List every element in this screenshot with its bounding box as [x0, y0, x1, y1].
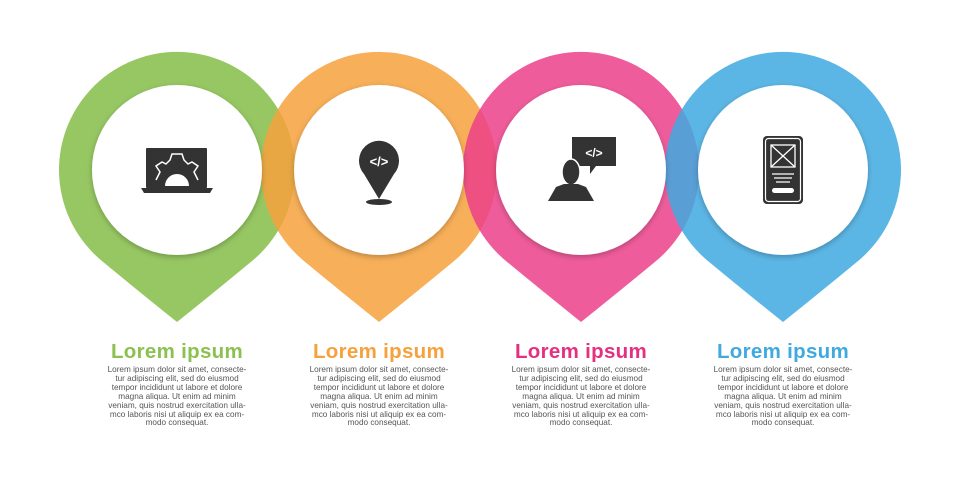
text: blue — [714, 365, 852, 427]
icon: code location — [359, 141, 399, 205]
text: orange: modo consequat. — [348, 418, 410, 427]
text: pink — [512, 365, 650, 427]
text: green: magna aliqua. Ut enim ad minim — [118, 392, 236, 401]
icon: mobile wireframe — [763, 136, 803, 204]
text: pink: tempor incididunt ut labore et dolore — [516, 383, 646, 392]
text: orange — [310, 365, 448, 427]
text: pink: veniam, quis nostrud exercitation ulla- — [512, 401, 650, 410]
text: blue: mco laboris nisi ut aliquip ex ea com- — [716, 410, 850, 419]
title: blue: Lorem ipsum — [717, 340, 849, 363]
text: green: tempor incididunt ut labore et dolore — [112, 383, 242, 392]
text: green: tur adipiscing elit, sed do eiusmod — [115, 374, 239, 383]
text: blue: veniam, quis nostrud exercitation ulla- — [714, 401, 852, 410]
pin: blue — [665, 52, 901, 322]
pin: green — [59, 52, 295, 322]
icon: laptop gear — [141, 148, 213, 193]
pin: orange — [261, 52, 497, 322]
text: pink: modo consequat. — [550, 418, 612, 427]
text: orange: mco laboris nisi ut aliquip ex ea com- — [312, 410, 446, 419]
text: pink: tur adipiscing elit, sed do eiusmod — [519, 374, 643, 383]
text: blue: tempor incididunt ut labore et dolore — [718, 383, 848, 392]
text: orange: tur adipiscing elit, sed do eiusmod — [317, 374, 441, 383]
text: green: Lorem ipsum dolor sit amet, consecte- — [108, 365, 246, 374]
text: pink: mco laboris nisi ut aliquip ex ea com- — [514, 410, 648, 419]
pin: pink — [463, 52, 699, 322]
text: blue: modo consequat. — [752, 418, 814, 427]
text: blue: magna aliqua. Ut enim ad minim — [724, 392, 842, 401]
text: green: mco laboris nisi ut aliquip ex ea com- — [110, 410, 244, 419]
text: orange: Lorem ipsum dolor sit amet, consecte- — [310, 365, 448, 374]
text: pink: Lorem ipsum dolor sit amet, consecte- — [512, 365, 650, 374]
text: green — [108, 365, 246, 427]
text: orange: veniam, quis nostrud exercitation ulla- — [310, 401, 448, 410]
title: green: Lorem ipsum — [111, 340, 243, 363]
text: pink: magna aliqua. Ut enim ad minim — [522, 392, 640, 401]
text: orange: tempor incididunt ut labore et dolore — [314, 383, 444, 392]
white circles — [92, 85, 868, 255]
text: blue: tur adipiscing elit, sed do eiusmod — [721, 374, 845, 383]
text: blue: Lorem ipsum dolor sit amet, consecte- — [714, 365, 852, 374]
text: orange: magna aliqua. Ut enim ad minim — [320, 392, 438, 401]
icon: programmer — [548, 137, 616, 201]
icon: programmer: </> — [585, 146, 603, 160]
text: green: veniam, quis nostrud exercitation ulla- — [108, 401, 246, 410]
icon: code location: </> — [370, 154, 389, 169]
text: green: modo consequat. — [146, 418, 208, 427]
title: pink: Lorem ipsum — [515, 340, 647, 363]
title: orange: Lorem ipsum — [313, 340, 445, 363]
